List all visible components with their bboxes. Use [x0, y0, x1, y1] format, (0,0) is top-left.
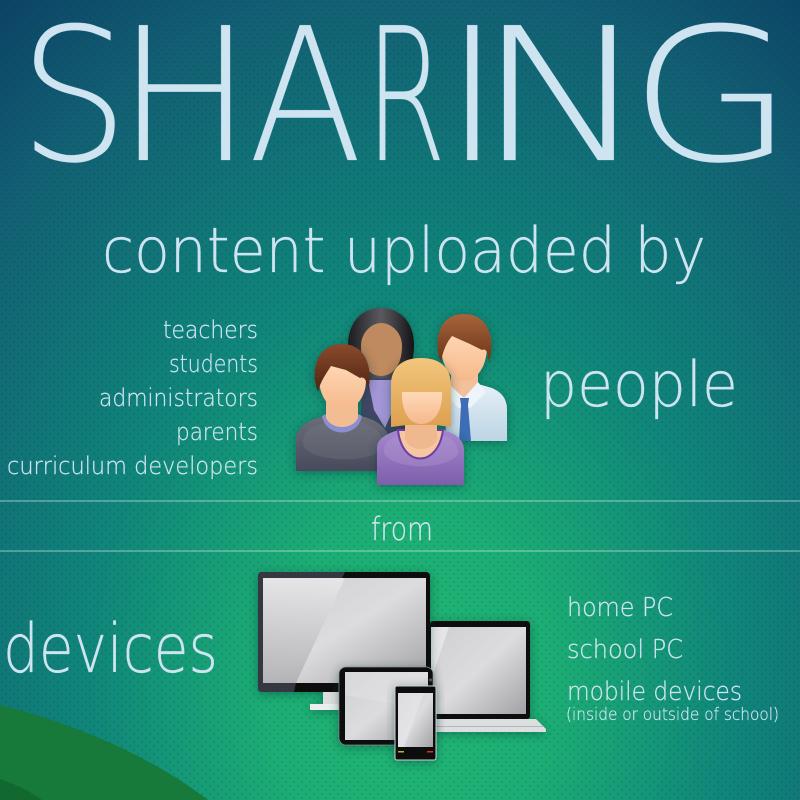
person: woman front: [377, 358, 464, 485]
device type: home PC: home PC: [567, 593, 673, 623]
subtitle: content uploaded by: [102, 214, 706, 287]
title: [19, 0, 794, 205]
device type: mobile devices: mobile devices: [567, 677, 742, 707]
device: laptop: [430, 621, 546, 732]
list: people roles: [7, 316, 258, 480]
device: phone: [395, 686, 436, 760]
icon: group of people: [296, 308, 507, 485]
role: curriculum developers: curriculum developers: [7, 452, 258, 480]
role: students: students: [169, 350, 258, 378]
label: people: people: [540, 348, 738, 421]
icon: group of devices: [258, 572, 546, 760]
person: man right: [438, 314, 507, 441]
device type: school PC: school PC: [567, 635, 683, 665]
role: parents: parents: [176, 418, 258, 446]
label: from: from: [371, 510, 433, 548]
person: man left: [296, 344, 390, 471]
role: administrators: administrators: [99, 384, 258, 412]
device: tablet: [339, 667, 433, 745]
hill shape: [0, 705, 208, 800]
device type note: (inside or outside of school): [566, 705, 779, 725]
list: device types: [566, 593, 779, 725]
device: monitor: [258, 572, 430, 710]
role: teachers: teachers: [163, 316, 258, 344]
divider lines: [0, 500, 800, 552]
person: woman back: [348, 308, 414, 440]
label: devices: devices: [3, 610, 218, 689]
